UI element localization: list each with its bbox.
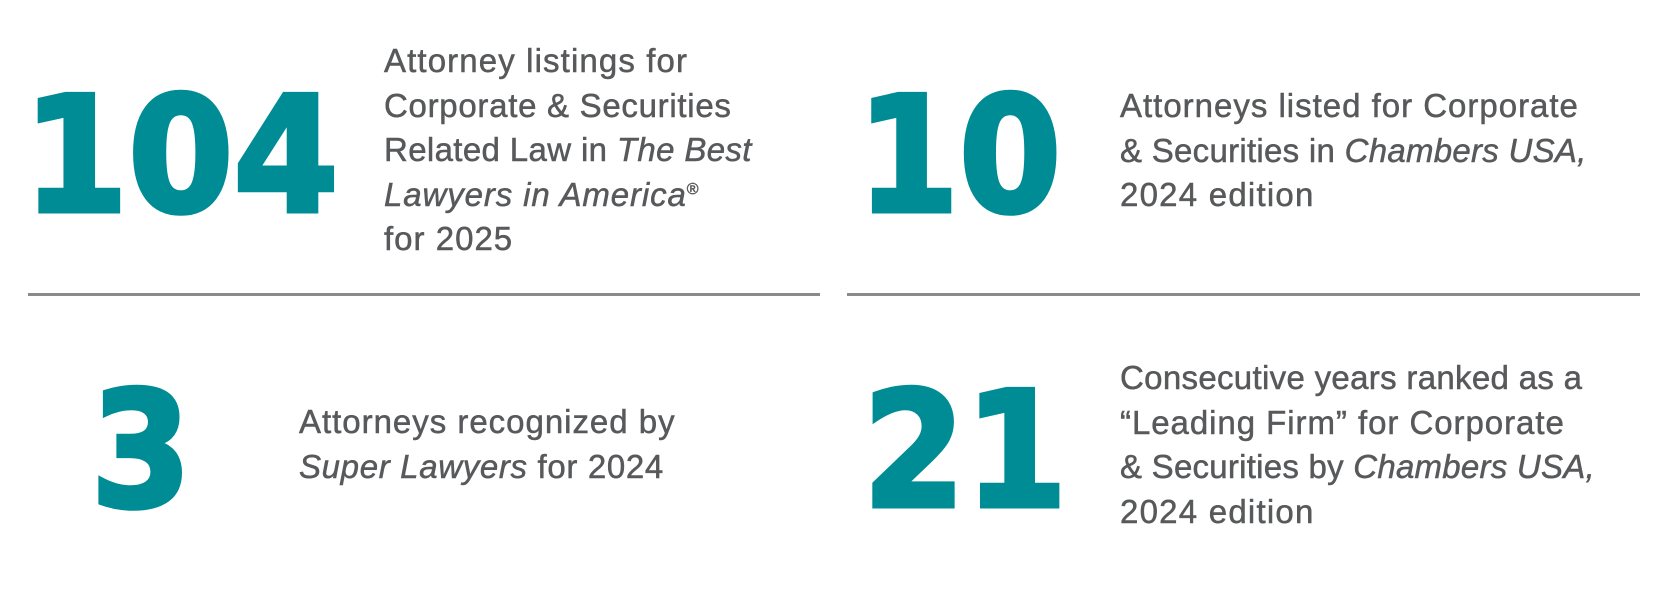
text: 10 description xyxy=(1120,87,1587,213)
text: 21 description: Consecutive years ranked as a xyxy=(1120,359,1582,396)
text: 21 description: & Securities by Chambers USA, xyxy=(1120,448,1595,485)
text: 21 description: “Leading Firm” for Corporate xyxy=(1120,404,1565,441)
stat: 10: 10 xyxy=(857,62,1061,248)
text: 104 description xyxy=(384,42,753,257)
divider: left xyxy=(28,292,820,296)
text: 104 description: Related Law in The Best xyxy=(384,131,752,168)
divider: right xyxy=(847,292,1640,296)
text: 3 description: Attorneys recognized by xyxy=(299,403,676,440)
text: 104 description: Attorney listings for xyxy=(384,42,688,79)
text: 3 description xyxy=(298,403,676,486)
text: 10 description: 2024 edition xyxy=(1120,176,1315,213)
stat: 104: 104 xyxy=(23,62,339,248)
text: 104 description: Lawyers in America® xyxy=(384,176,699,213)
text: 10 description: & Securities in Chambers USA, xyxy=(1120,132,1587,169)
text: 21 description xyxy=(1120,359,1595,530)
text: 3 description: Super Lawyers for 2024 xyxy=(299,448,664,485)
stat: 3: 3 xyxy=(91,356,191,544)
text: 21 description: 2024 edition xyxy=(1120,493,1315,530)
text: 10 description: Attorneys listed for Corporate xyxy=(1120,87,1579,124)
text: 104 description: Corporate & Securities xyxy=(384,87,732,124)
stat: 21: 21 xyxy=(863,356,1067,544)
text: 104 description: for 2025 xyxy=(384,220,513,257)
